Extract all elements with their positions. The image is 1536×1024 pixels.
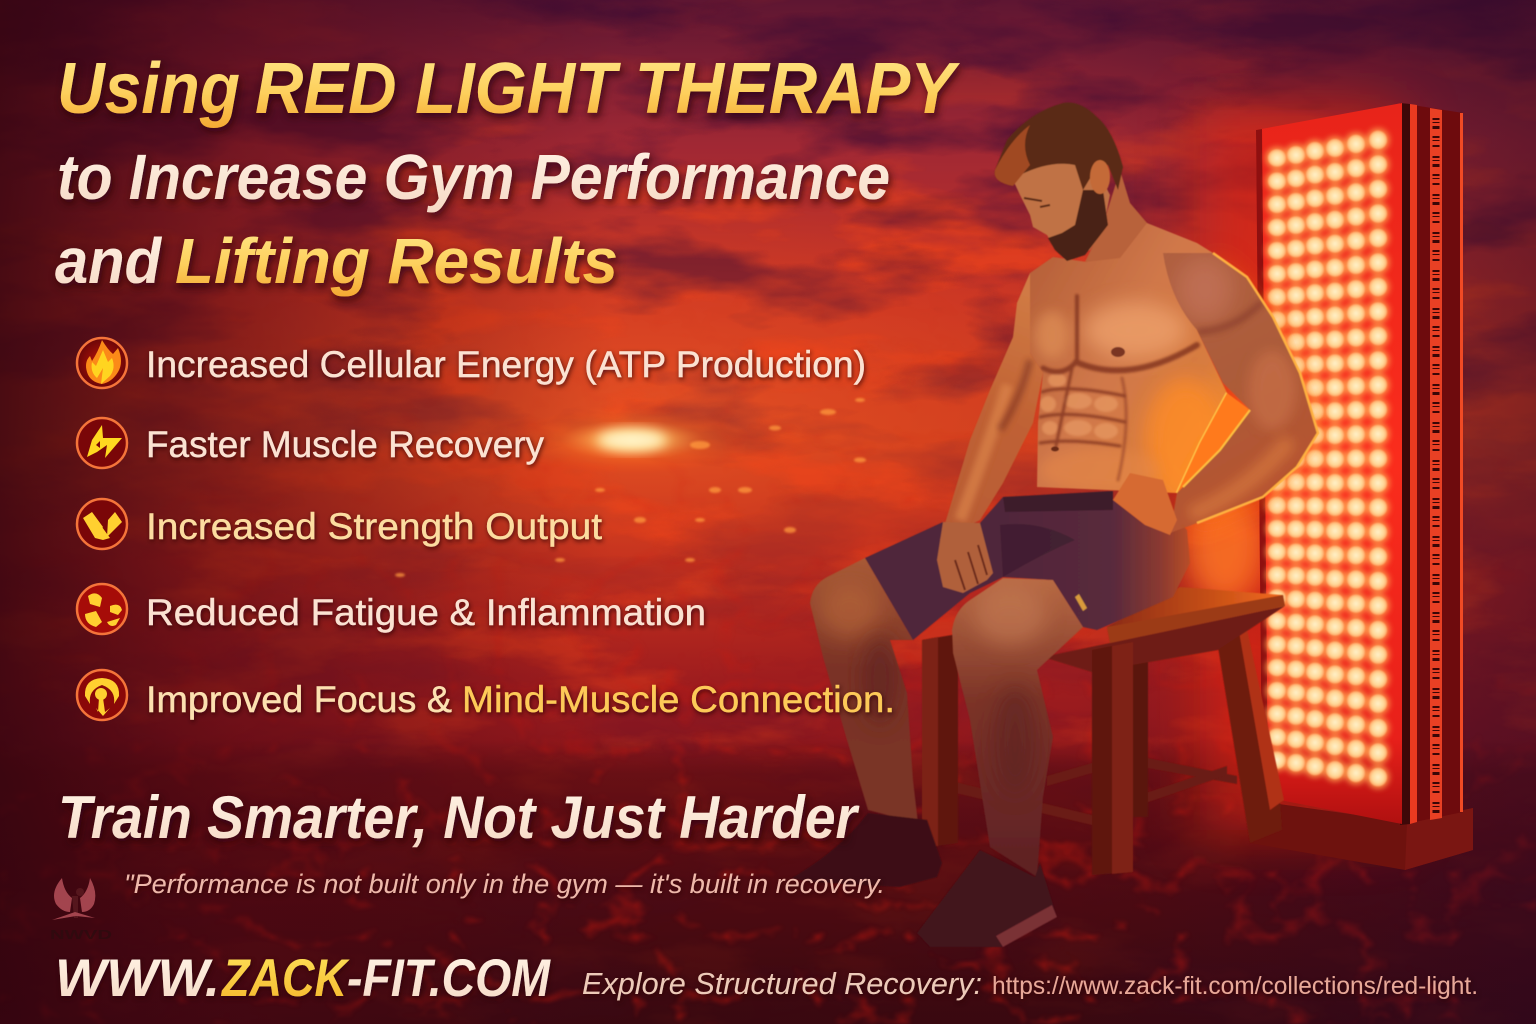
website: ZACK: [220, 949, 350, 1008]
quote: "Performance is not built only in the gym — it's built in recovery.: [124, 869, 885, 899]
title: RED LIGHT THERAPY: [255, 49, 961, 129]
benefit 4: fatigue: Reduced Fatigue & Inflammation: [146, 592, 706, 633]
explore link: [582, 966, 1478, 1001]
explore link: Explore Structured Recovery:: [582, 966, 982, 1001]
benefit 2: recovery: Faster Muscle Recovery: [146, 424, 544, 465]
seat: [1107, 587, 1285, 643]
viewer-left arm: [945, 274, 1044, 524]
sun flare on the horizon: [395, 398, 866, 577]
benefit 5: focus: Mind-Muscle Connection.: [462, 679, 895, 720]
explore link: https://www.zack-fit.com/collections/red-light.: [992, 972, 1478, 1000]
shorts: [865, 491, 1190, 640]
red light panel: [1185, 103, 1473, 870]
torso rim light: [1177, 393, 1227, 493]
right leg: [952, 578, 1083, 877]
viewer-right arm: [1163, 253, 1318, 533]
website: [55, 949, 552, 1008]
benefit 2: recovery: [77, 418, 544, 468]
logo mark: [50, 878, 112, 942]
apron: [1043, 606, 1285, 672]
LED grid: [1266, 128, 1390, 789]
right leg: [1218, 620, 1282, 843]
waistband: [1003, 491, 1113, 512]
title: Lifting Results: [175, 225, 618, 297]
title: to Increase Gym Performance: [57, 141, 890, 213]
benefit 5: focus: [77, 670, 895, 720]
viewer-right hand: [1113, 473, 1177, 535]
panel side: [1400, 103, 1463, 825]
neck: [1085, 170, 1147, 262]
logo mark: NWVD: [50, 927, 112, 942]
viewer-left hand: [937, 522, 993, 593]
benefit 5: focus: Improved Focus &: [146, 679, 452, 720]
right shoe: [917, 850, 1057, 947]
back leg: [1133, 640, 1148, 817]
crossbars: [943, 779, 1092, 825]
face: [1013, 160, 1110, 260]
gap glow between arm and torso: [1177, 393, 1250, 493]
left shin: [810, 558, 918, 823]
torso: [1030, 222, 1228, 494]
benefit 3: strength: [77, 499, 603, 549]
stool: [922, 587, 1285, 875]
icon: flame: [77, 338, 127, 388]
panel front face: [1256, 103, 1402, 824]
panel base: [1250, 800, 1473, 870]
barcode strip: [1432, 118, 1440, 815]
icon: lightning: [77, 418, 127, 468]
rim glow: [1190, 253, 1318, 530]
icon: recovery swirl: [77, 584, 127, 634]
left shoe: [792, 813, 942, 887]
rear left leg: [922, 634, 958, 848]
website: WWW.: [55, 949, 220, 1008]
nipple: [1111, 347, 1125, 357]
title: Using: [57, 49, 240, 129]
icon: flexed arms: [77, 499, 127, 549]
beard: [1048, 190, 1108, 261]
front leg: [1092, 642, 1133, 875]
icon: brain: [77, 670, 127, 720]
website: -FIT.COM: [347, 949, 552, 1008]
benefits list: [77, 338, 895, 720]
benefit 1: cellular energy: Increased Cellular Energy (ATP Production): [146, 344, 866, 385]
hem tag: [1075, 594, 1087, 611]
navel: [1051, 446, 1059, 452]
title: [55, 49, 961, 297]
title: and: [55, 225, 163, 297]
tagline: Train Smarter, Not Just Harder: [58, 784, 860, 851]
ear: [1090, 160, 1110, 194]
man: [792, 103, 1318, 947]
benefit 3: strength: Increased Strength Output: [146, 506, 603, 547]
arm rim light: [1197, 253, 1318, 523]
hair: [995, 103, 1123, 190]
